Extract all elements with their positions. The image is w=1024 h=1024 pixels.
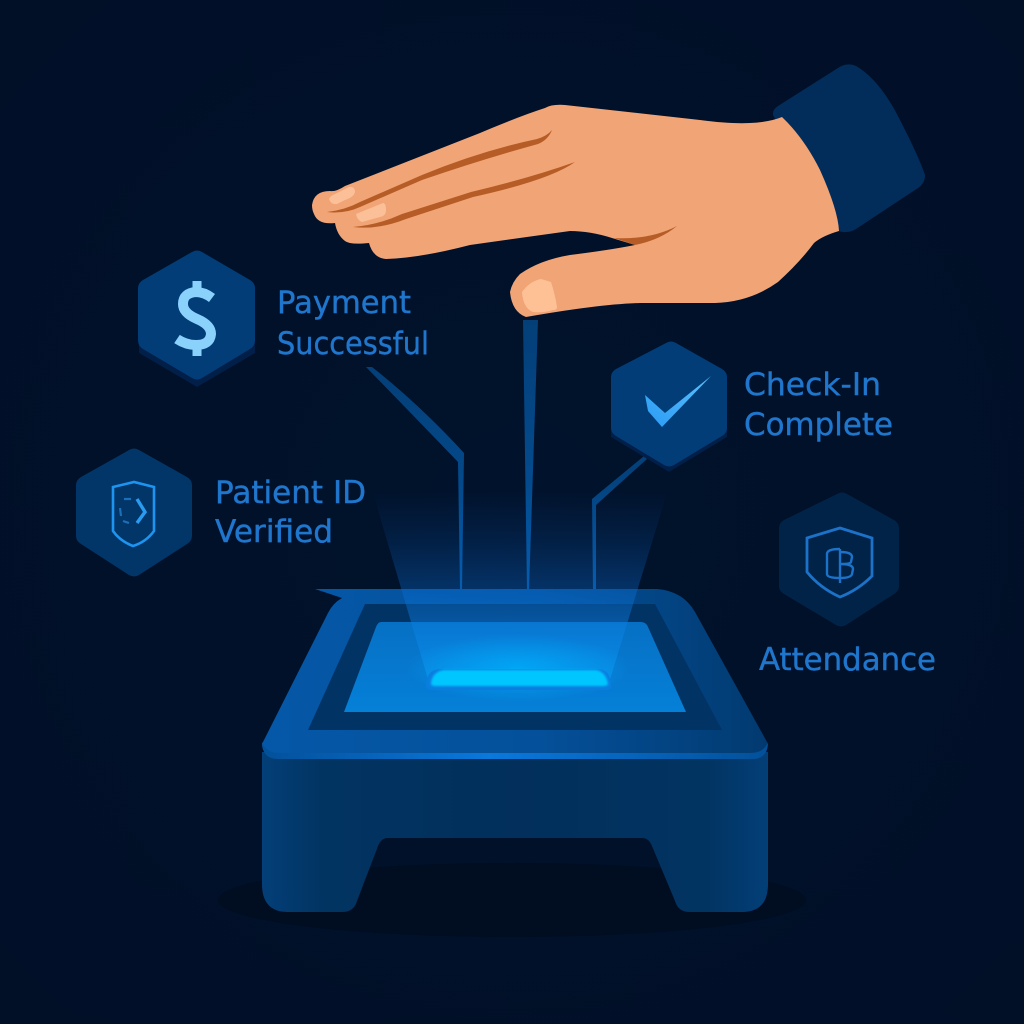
shield with chevron <box>113 482 154 546</box>
scanner body <box>262 752 768 912</box>
finger crease <box>327 130 552 212</box>
light beam <box>372 490 668 686</box>
hand shape <box>312 105 839 317</box>
scanner glow pad <box>406 634 630 702</box>
thumbnail <box>522 279 557 312</box>
scanner screen <box>344 622 686 712</box>
shield with monogram <box>807 528 872 597</box>
label: Attendance: Attendance <box>759 642 936 678</box>
fingernail <box>356 203 386 222</box>
shirt cuff <box>773 64 925 232</box>
label: Payment Successful: Successful <box>277 326 429 362</box>
finger crease <box>353 162 575 228</box>
label: Check-In Complete <box>744 367 893 443</box>
label: Patient ID Verified: Verified <box>215 514 333 550</box>
label: Patient ID Verified <box>215 475 366 550</box>
scanner top plate <box>262 589 767 757</box>
scanner device <box>262 589 768 912</box>
scanner rim highlight <box>262 742 768 759</box>
icon: payment hexagon <box>138 250 255 387</box>
icon: patient ID hexagon <box>76 448 192 576</box>
fingernail <box>329 187 355 204</box>
connector lines from hand and hexagons to scanner <box>366 320 647 590</box>
label: Payment Successful: Payment <box>277 285 411 321</box>
icon: attendance hexagon <box>779 492 899 626</box>
hand <box>312 64 925 317</box>
thumb crease <box>614 226 677 245</box>
label: Payment Successful <box>277 285 429 362</box>
label: Check-In Complete: Complete <box>744 407 893 443</box>
dollar glyph <box>177 281 212 356</box>
checkmark <box>645 376 711 427</box>
device floor shadow <box>218 863 806 937</box>
label: Check-In Complete: Check-In <box>744 367 881 403</box>
label: Patient ID Verified: Patient ID <box>215 475 366 511</box>
icon: check-in hexagon <box>611 342 727 472</box>
inner dark frame <box>308 604 722 730</box>
